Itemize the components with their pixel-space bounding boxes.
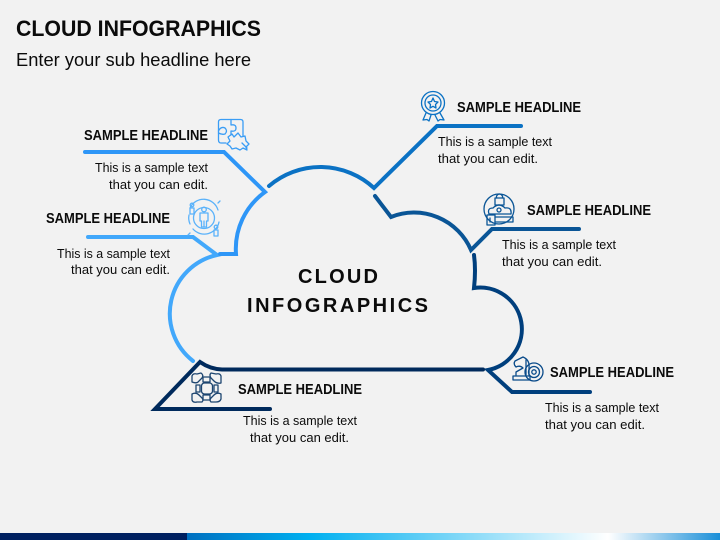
footer gradient section xyxy=(187,533,720,540)
text block: that you can edit. xyxy=(438,151,538,166)
segment: bottom line xyxy=(155,362,483,409)
footer bar xyxy=(0,533,720,540)
text block: that you can edit. xyxy=(545,417,645,432)
icon: award rosette xyxy=(422,92,444,121)
segment: top lobe xyxy=(269,126,521,188)
segment: left lobe xyxy=(88,237,217,361)
text block: that you can edit. xyxy=(109,177,208,192)
center word two: INFOGRAPHICS xyxy=(247,295,428,317)
heading: SAMPLE HEADLINE xyxy=(550,365,674,381)
panel: left headline xyxy=(46,199,220,277)
icon: cloud lock and key xyxy=(484,194,514,225)
text block: This is a sample text xyxy=(57,246,170,261)
footer dark section xyxy=(0,533,187,540)
text block: This is a sample text xyxy=(545,400,659,415)
heading: SAMPLE HEADLINE xyxy=(46,211,170,227)
heading: SAMPLE HEADLINE xyxy=(457,100,581,116)
text block: This is a sample text xyxy=(95,160,208,175)
heading: SAMPLE HEADLINE xyxy=(527,203,651,219)
icon: puzzle xyxy=(218,120,249,150)
text block: that you can edit. xyxy=(250,430,349,445)
title: CLOUD INFOGRAPHICS xyxy=(16,16,261,41)
heading: SAMPLE HEADLINE xyxy=(84,128,208,144)
subtitle: Enter your sub headline here xyxy=(16,50,251,70)
panel: lower right headline xyxy=(513,357,674,432)
segment: upper left lobe xyxy=(85,152,265,254)
panel: bottom headline xyxy=(192,373,362,445)
icon: chess knight and gear xyxy=(513,357,543,381)
center heading xyxy=(247,266,428,317)
text block: This is a sample text xyxy=(243,413,357,428)
panel: top headline xyxy=(422,92,581,166)
text block: This is a sample text xyxy=(438,134,552,149)
text block xyxy=(545,400,659,432)
segment: right lobe xyxy=(474,255,590,392)
heading: SAMPLE HEADLINE xyxy=(238,382,362,398)
center word one: CLOUD xyxy=(298,266,378,288)
text block: that you can edit. xyxy=(71,262,170,277)
text block xyxy=(95,160,208,192)
text block xyxy=(57,246,170,277)
text block xyxy=(243,413,357,445)
text block: This is a sample text xyxy=(502,237,616,252)
text block xyxy=(502,237,616,269)
segment: upper right lobe xyxy=(375,196,579,250)
panel: upper left headline xyxy=(84,120,249,192)
text block: that you can edit. xyxy=(502,254,602,269)
icon: people in a circle xyxy=(188,199,220,236)
panel: upper right headline xyxy=(484,194,651,269)
text block xyxy=(438,134,552,166)
cloud outline with connector lines xyxy=(85,126,590,409)
icon: linked hands xyxy=(192,373,221,402)
